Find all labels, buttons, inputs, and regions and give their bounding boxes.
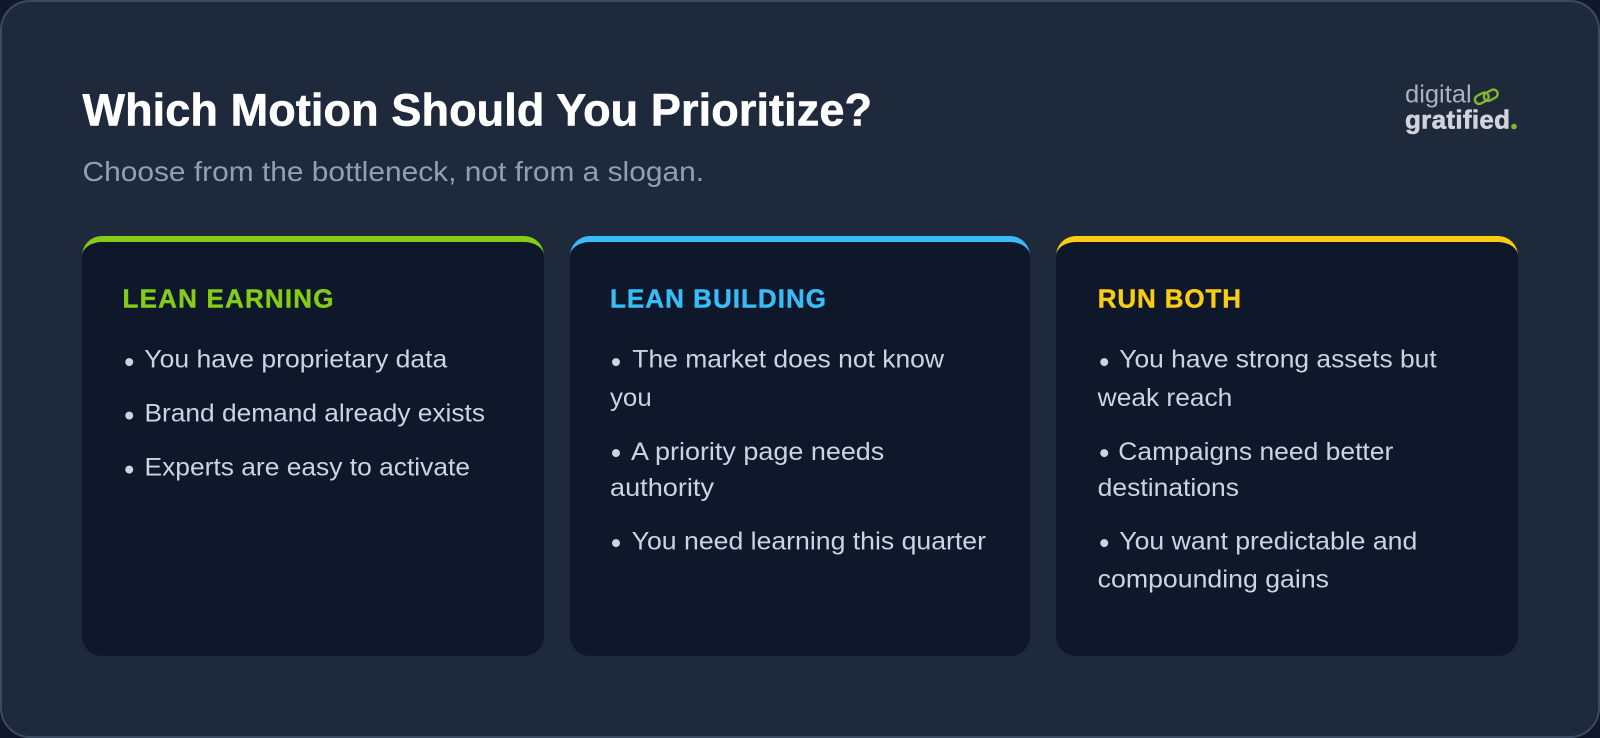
list: lean earning items: You have proprietary data: [144, 346, 447, 374]
list: lean building items: •: [612, 348, 620, 376]
subtitle: Choose from the bottleneck, not from a slogan.: [82, 156, 704, 187]
list: lean building items: you: [610, 384, 652, 412]
heading: lean building: LEAN BUILDING: [610, 284, 826, 314]
list: lean earning items: Experts are easy to activate: [144, 454, 470, 482]
list: run both items: compounding gains: [1098, 566, 1329, 594]
list: run both items: weak reach: [1097, 384, 1232, 412]
list: lean building items: The market does not know: [632, 346, 945, 374]
list: run both items: You have strong assets but: [1119, 346, 1437, 374]
list: lean earning items: •: [125, 402, 134, 430]
heading: lean earning: LEAN EARNING: [122, 284, 334, 314]
list: lean building items: •: [612, 440, 620, 468]
list: lean earning items: Brand demand already exists: [144, 400, 485, 428]
heading: run both: RUN BOTH: [1098, 284, 1241, 314]
list: lean building items: A priority page needs: [631, 438, 884, 466]
logo: digital gratified: gratified: [1405, 104, 1510, 134]
title: Which Motion Should You Prioritize?: [82, 84, 872, 136]
list: run both items: [1097, 346, 1437, 594]
icon: chain link: [1473, 88, 1499, 105]
panel: lean earning: [82, 236, 544, 656]
list: run both items: You want predictable and: [1119, 527, 1417, 555]
list: lean building items: [610, 346, 986, 558]
list: lean building items: You need learning this quarter: [632, 527, 986, 555]
logo: digital gratified: [1405, 81, 1517, 134]
list: lean earning items: [125, 346, 485, 484]
list: lean earning items: •: [125, 348, 134, 376]
list: run both items: •: [1100, 530, 1109, 558]
list: run both items: •: [1100, 440, 1109, 468]
list: lean building items: authority: [610, 474, 715, 502]
panel: run both: [1056, 236, 1518, 656]
panel: lean building: [570, 236, 1030, 656]
logo: digital gratified: digital: [1405, 81, 1472, 109]
list: lean earning items: •: [125, 456, 134, 484]
list: run both items: •: [1100, 348, 1109, 376]
list: run both items: destinations: [1098, 474, 1239, 502]
logo dot: [1511, 124, 1517, 129]
list: lean building items: •: [612, 530, 620, 558]
list: run both items: Campaigns need better: [1118, 438, 1393, 466]
